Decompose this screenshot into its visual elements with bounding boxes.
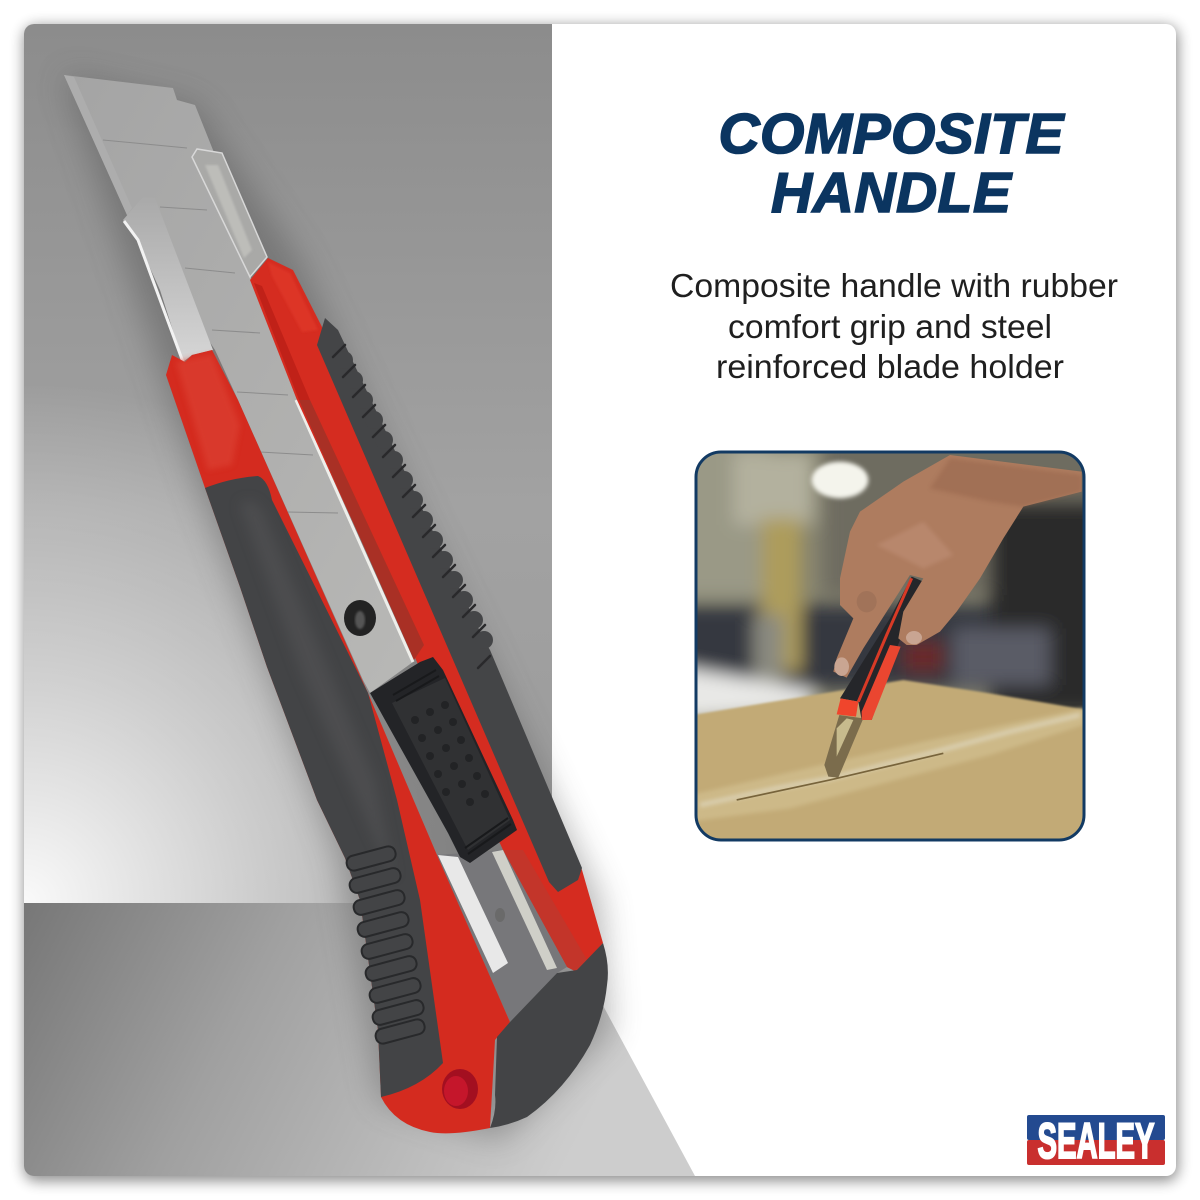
steel strip: rear [192,149,267,277]
title: HANDLE [771,161,1013,225]
hanging hole [442,1069,478,1109]
title: COMPOSITE [718,102,1065,166]
panel: product photo background [24,24,695,1176]
knife shadow [64,75,610,1140]
steel strip: front [123,197,213,362]
image: utility knife [64,75,610,1140]
dark end cap [490,943,608,1128]
description text [670,267,1118,385]
photo border [696,452,1084,840]
description text: comfort grip and steel [728,308,1052,345]
dark grip: side [205,476,443,1097]
dark grip: top ribbed [317,318,582,892]
slider button [370,657,517,863]
blade hole [344,600,376,636]
red highlight [176,354,240,470]
red body: left side [166,350,510,1133]
metal window [437,850,567,1022]
blade [64,75,413,693]
cardboard box [698,678,1082,838]
description text: Composite handle with rubber [670,267,1118,304]
title [718,102,1065,225]
hand [833,455,1082,678]
photo: hand cutting a taped box [694,450,1086,842]
utility knife in hand [824,577,923,778]
blurred workshop background [698,454,1082,716]
white blade edge rail [296,400,413,662]
grip ribs [345,845,426,1045]
description text: reinforced blade holder [716,348,1064,385]
red body: right side [250,258,603,972]
